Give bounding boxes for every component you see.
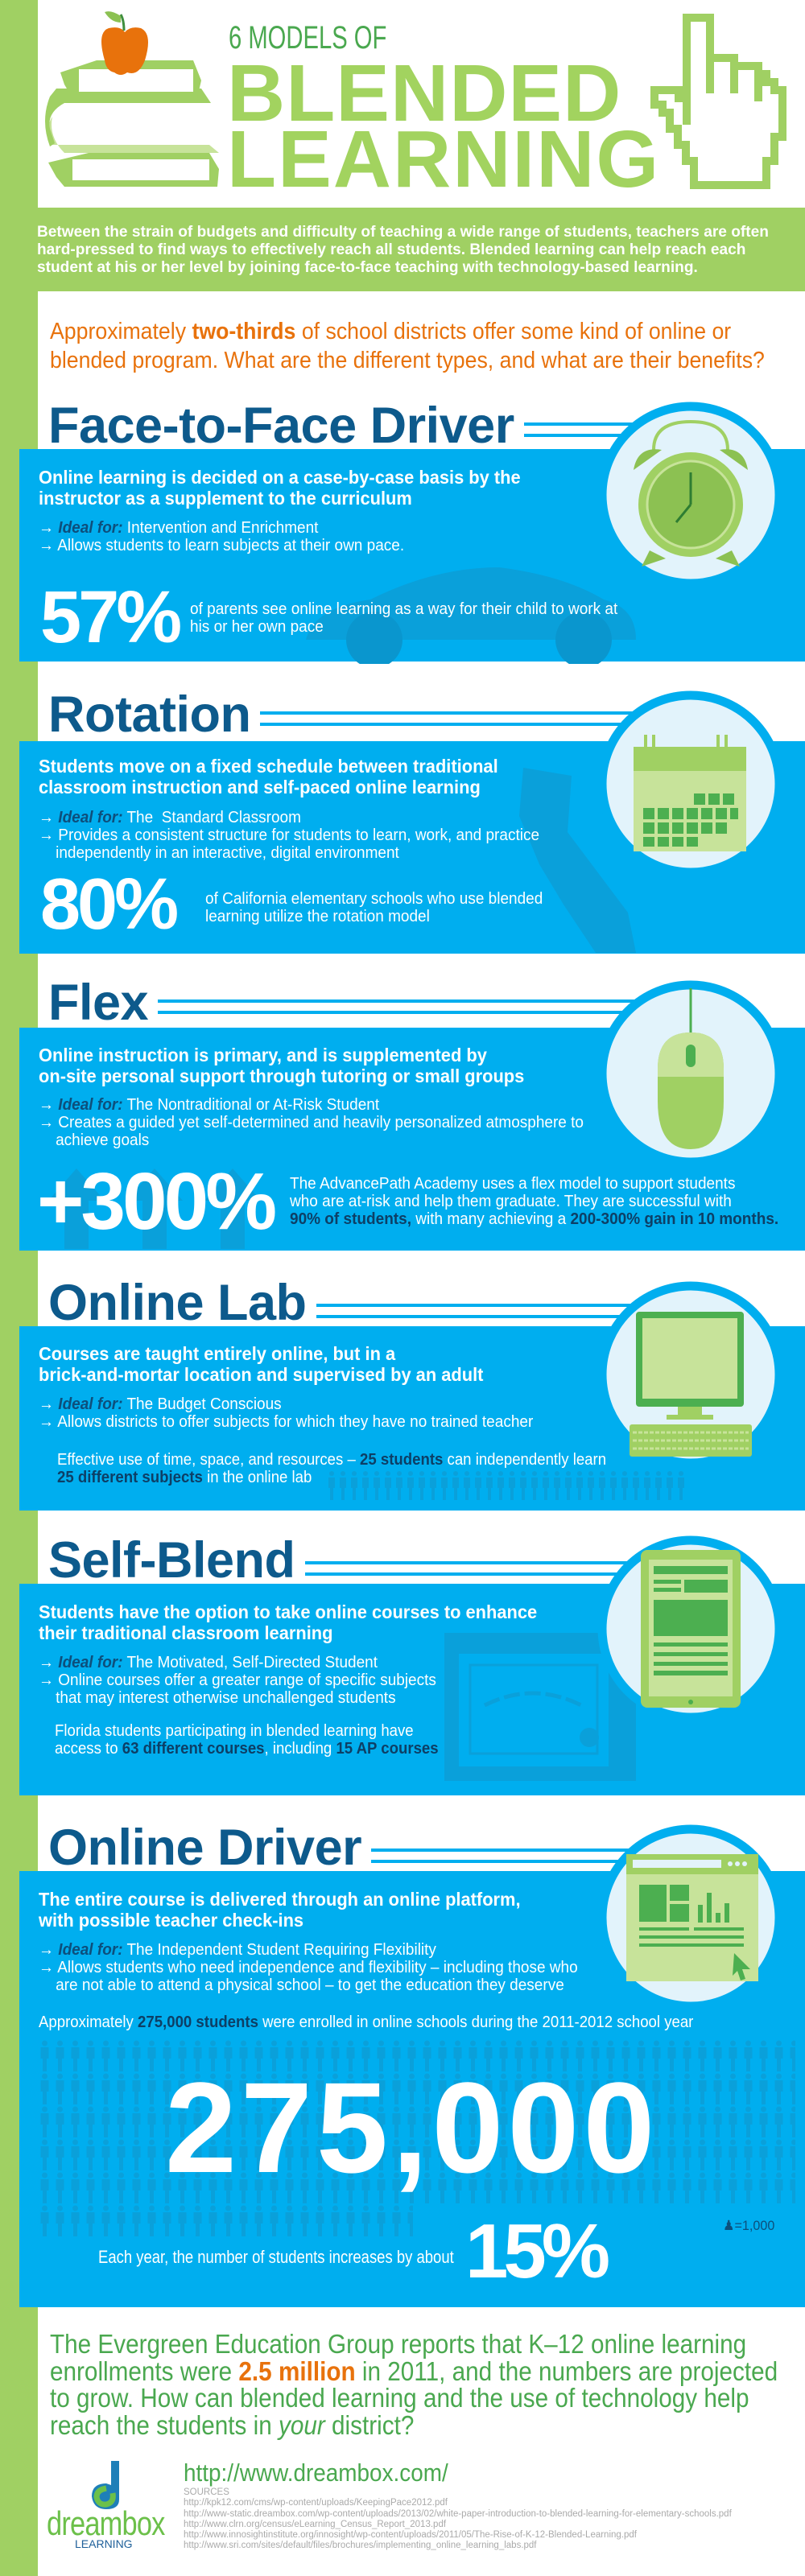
icon: mouse	[607, 980, 774, 1157]
icon: pixel hand cursor	[650, 14, 786, 189]
bullets: → Ideal for: The Budget Conscious	[39, 1395, 282, 1413]
panel: flex: who are at-risk and help them graduate. They are successful with	[290, 1193, 732, 1210]
stat text: 25 different subjects in the online lab	[57, 1469, 312, 1486]
bullets	[39, 1941, 578, 1994]
bullets: → Ideal for: The Nontraditional or At-Risk Student	[39, 1096, 379, 1114]
stat 275,000: 275,000	[165, 2055, 658, 2199]
description: Students move on a fixed schedule between traditional	[39, 756, 498, 777]
title: blended: BLENDED	[227, 48, 621, 138]
bullets	[39, 1096, 584, 1149]
icon: tablet	[597, 1535, 774, 1713]
logo: dreambox learning: dreambox	[47, 2504, 165, 2542]
orange question text: blended program. What are the different types, and what are their benefits?	[50, 348, 765, 373]
description	[39, 1601, 537, 1643]
intro band	[0, 208, 805, 291]
panel: flex	[19, 975, 805, 1251]
orange question text: Approximately two-thirds of school districts offer some kind of online or	[50, 319, 731, 344]
panel: self-blend	[19, 1532, 805, 1795]
growth text: Each year, the number of students increases by about	[98, 2247, 454, 2267]
panel: online driver	[19, 1820, 805, 2307]
bullets: → Ideal for: Intervention and Enrichment	[39, 519, 318, 537]
description: on-site personal support through tutoring or small groups	[39, 1065, 524, 1086]
panel: online lab	[19, 1275, 805, 1511]
background people row	[328, 1471, 684, 1500]
closing text: enrollments were 2.5 million in 2011, and the numbers are projected	[50, 2356, 778, 2385]
panel: rotation	[19, 686, 805, 954]
bullets: → Online courses offer a greater range of specific subjects	[39, 1671, 436, 1689]
closing text: to grow. How can blended learning and the use of technology help	[50, 2383, 749, 2413]
description	[39, 1889, 521, 1931]
legend: ♟=1,000	[723, 2218, 774, 2233]
bullets: → Ideal for: The Independent Student Requiring Flexibility	[39, 1941, 436, 1959]
description: with possible teacher check-ins	[39, 1910, 303, 1931]
url: http://www.dreambox.com/	[184, 2459, 448, 2487]
description	[39, 756, 498, 798]
panel: rotation: of California elementary schools who use blended	[205, 890, 543, 908]
background california	[519, 768, 636, 953]
description	[39, 1045, 524, 1086]
description: Courses are taught entirely online, but in a	[39, 1343, 395, 1364]
panel: rotation: learning utilize the rotation model	[205, 908, 430, 925]
bullets	[39, 809, 539, 862]
bullets: → Ideal for: The Motivated, Self-Directed Student	[39, 1654, 378, 1671]
description: Students have the option to take online courses to enhance	[39, 1601, 537, 1622]
description: The entire course is delivered through an online platform,	[39, 1889, 521, 1910]
closing text	[50, 2331, 778, 2438]
panel: face-to-face driver: of parents see online learning as a way for their child to work at	[190, 600, 617, 618]
bullets: independently in an interactive, digital environment	[56, 844, 399, 862]
description: Online instruction is primary, and is supplemented by	[39, 1045, 487, 1065]
header illustration: books and apple	[45, 11, 219, 187]
left green bar	[0, 0, 38, 2576]
enrollment text: Approximately 275,000 students were enrolled in online schools during the 2011-2012 school year	[39, 2013, 693, 2031]
background certificate	[444, 1633, 636, 1781]
bullets: achieve goals	[56, 1131, 149, 1149]
sources: http://kpk12.com/cms/wp-content/uploads/KeepingPace2012.pdf	[184, 2498, 448, 2508]
stat text: Florida students participating in blended learning have	[55, 1722, 414, 1740]
heading: Flex	[48, 975, 148, 1031]
bullets: → Ideal for: The Standard Classroom	[39, 809, 301, 826]
stat 57%: 57%	[40, 576, 179, 658]
heading: Online Driver	[48, 1820, 361, 1876]
bullets: → Provides a consistent structure for students to learn, work, and practice	[39, 826, 539, 844]
description: Online learning is decided on a case-by-case basis by the	[39, 467, 521, 488]
stat 15%: 15%	[465, 2208, 605, 2294]
stat +300%: +300%	[37, 1156, 274, 1247]
bullets: → Creates a guided yet self-determined and heavily personalized atmosphere to	[39, 1114, 584, 1131]
panel: face-to-face driver: his or her own pace	[190, 618, 324, 636]
bullets	[39, 1654, 436, 1707]
panel: face-to-face driver	[19, 398, 805, 664]
description	[39, 1343, 483, 1385]
intro text: hard-pressed to find ways to effectively reach all students. Blended learning can help reach each	[37, 241, 745, 258]
closing text: reach the students in your district?	[50, 2409, 414, 2440]
intro text	[37, 223, 769, 276]
sources: http://www.clrn.org/census/eLearning_Census_Report_2013.pdf	[184, 2520, 446, 2529]
bullets: → Allows students who need independence and flexibility – including those who	[39, 1959, 578, 1976]
description: instructor as a supplement to the curriculum	[39, 488, 412, 509]
sources: http://www.sri.com/sites/default/files/brochures/implementing_online_learning_labs.pdf	[184, 2541, 537, 2550]
icon: alarm clock	[607, 402, 774, 579]
sources	[184, 2487, 732, 2552]
closing text: The Evergreen Education Group reports that K–12 online learning	[50, 2329, 746, 2359]
sources: http://www-static.dreambox.com/wp-content/uploads/2013/02/white-paper-introduction-to-blended-learning-for-elementary-schools.pdf	[184, 2509, 732, 2519]
panel: flex: 90% of students, with many achieving a 200-300% gain in 10 months.	[290, 1210, 778, 1228]
background arrows	[52, 1168, 261, 1249]
stat text	[55, 1722, 439, 1758]
description	[39, 467, 521, 509]
intro text: Between the strain of budgets and difficulty of teaching a wide range of students, teachers are often	[37, 223, 769, 241]
logo: dreambox learning	[47, 2461, 167, 2553]
icon: calendar	[607, 690, 774, 868]
sources: http://www.innosightinstitute.org/innosight/wp-content/uploads/2011/05/The-Rise-of-K-12-Blended-Learning.pdf	[184, 2530, 637, 2540]
description: their traditional classroom learning	[39, 1622, 332, 1643]
description: brick-and-mortar location and supervised by an adult	[39, 1364, 483, 1385]
description: classroom instruction and self-paced online learning	[39, 777, 481, 798]
title: 6 models of: 6 MODELS OF	[229, 20, 386, 56]
bullets: → Allows students to learn subjects at their own pace.	[39, 537, 404, 554]
stat text	[57, 1451, 606, 1486]
title: learning: LEARNING	[227, 114, 660, 204]
stat 80%: 80%	[40, 864, 175, 945]
sources: SOURCES	[184, 2487, 229, 2497]
stat text: Effective use of time, space, and resources – 25 students can independently learn	[57, 1451, 606, 1469]
icon: browser	[597, 1824, 784, 2011]
heading: Face-to-Face Driver	[48, 398, 514, 454]
bullets: → Allows districts to offer subjects for which they have no trained teacher	[39, 1413, 533, 1431]
bullets	[39, 519, 404, 554]
bullets: are not able to attend a physical school – to get the education they deserve	[56, 1976, 564, 1994]
intro text: student at his or her level by joining face-to-face teaching with technology-based learning.	[37, 258, 698, 276]
background car	[306, 567, 636, 664]
bullets: that may interest otherwise unchallenged students	[56, 1689, 396, 1707]
logo: dreambox learning: LEARNING	[75, 2537, 133, 2550]
stat text: access to 63 different courses, including 15 AP courses	[55, 1740, 439, 1758]
heading: Rotation	[48, 686, 250, 743]
people pictogram grid	[40, 2041, 795, 2236]
bullets	[39, 1395, 533, 1431]
orange question text	[50, 319, 765, 373]
heading: Self-Blend	[48, 1532, 295, 1589]
heading: Online Lab	[48, 1275, 307, 1331]
icon: computer	[607, 1281, 774, 1458]
panel: flex: The AdvancePath Academy uses a flex model to support students	[290, 1175, 735, 1193]
